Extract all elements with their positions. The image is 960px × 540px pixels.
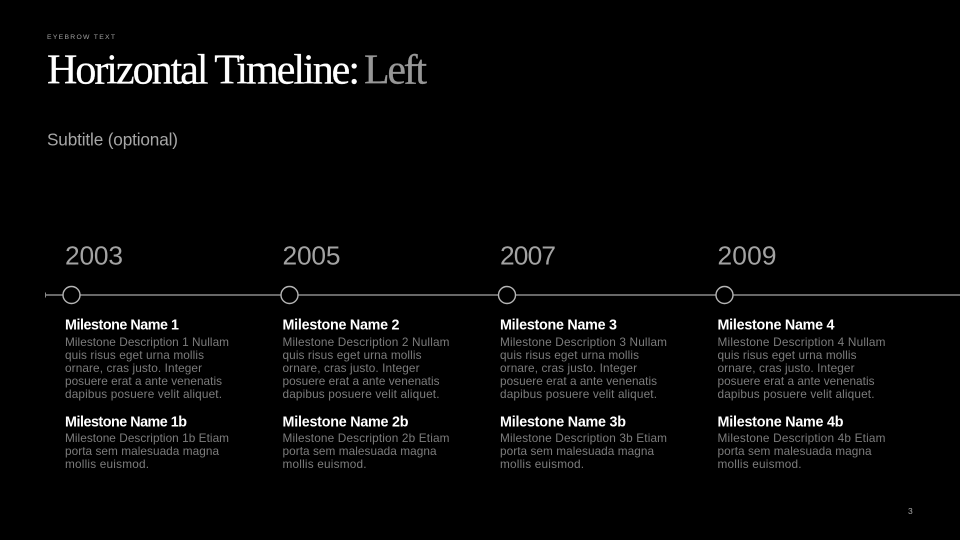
milestone description 2b	[282, 431, 450, 471]
milestone description 1b: Milestone Description 1b Etiam	[65, 431, 229, 445]
marker 4	[716, 286, 733, 304]
year 2007: 2007	[500, 240, 556, 270]
title: Horizontal Timeline:	[47, 48, 360, 94]
milestone description 2: quis risus eget urna mollis	[282, 348, 422, 362]
milestone description 3b: Milestone Description 3b Etiam	[500, 431, 667, 445]
milestone description 3b: porta sem malesuada magna	[500, 444, 654, 458]
milestone description 2: posuere erat a ante venenatis	[282, 374, 440, 388]
timeline axis	[46, 292, 960, 298]
milestone description 1: ornare, cras justo. Integer	[65, 361, 202, 375]
milestone description 4: ornare, cras justo. Integer	[718, 361, 855, 375]
milestone description 3: dapibus posuere velit aliquet.	[500, 387, 657, 401]
milestone description 4: dapibus posuere velit aliquet.	[718, 387, 874, 401]
milestone description 3b	[500, 431, 667, 471]
eyebrow text: EYEBROW TEXT	[47, 34, 115, 41]
milestone column 1	[63, 240, 229, 471]
milestone description 1: Milestone Description 1 Nullam	[65, 335, 229, 349]
milestone description 3: posuere erat a ante venenatis	[500, 374, 657, 388]
year 2005: 2005	[282, 240, 340, 270]
milestone description 2b: porta sem malesuada magna	[282, 444, 437, 458]
milestone description 4b	[718, 431, 886, 471]
milestone name 3b: Milestone Name 3b	[500, 414, 626, 430]
milestone description 1: quis risus eget urna mollis	[65, 348, 204, 362]
milestone name 1b: Milestone Name 1b	[65, 414, 187, 430]
milestone column 3	[498, 240, 667, 471]
milestone description 3: Milestone Description 3 Nullam	[500, 335, 667, 349]
milestone description 4b: porta sem malesuada magna	[718, 444, 872, 458]
milestone description 1: posuere erat a ante venenatis	[65, 374, 222, 388]
milestone description 1: dapibus posuere velit aliquet.	[65, 387, 222, 401]
milestone name 2b: Milestone Name 2b	[282, 414, 409, 430]
milestone description 2	[282, 335, 450, 401]
milestone description 3	[500, 335, 667, 401]
milestone description 4b: Milestone Description 4b Etiam	[718, 431, 886, 445]
title: Left	[364, 48, 427, 94]
milestone description 3b: mollis euismod.	[500, 457, 584, 471]
year 2009: 2009	[718, 240, 776, 270]
milestone description 2b: mollis euismod.	[282, 457, 366, 471]
milestone description 4b: mollis euismod.	[718, 457, 802, 471]
milestone column 2	[281, 240, 450, 471]
milestone name 3: Milestone Name 3	[500, 318, 617, 334]
milestone column 4	[716, 240, 886, 471]
marker 3	[498, 286, 516, 304]
milestone description 2b: Milestone Description 2b Etiam	[282, 431, 450, 445]
marker 1	[63, 286, 80, 304]
milestone description 1b: mollis euismod.	[65, 457, 149, 471]
milestone name 1: Milestone Name 1	[65, 318, 179, 334]
milestone description 3: ornare, cras justo. Integer	[500, 361, 637, 375]
milestone description 1b	[65, 431, 229, 471]
milestone description 1b: porta sem malesuada magna	[65, 444, 219, 458]
year 2003: 2003	[65, 240, 123, 270]
marker 2	[281, 286, 298, 304]
milestone name 4: Milestone Name 4	[718, 318, 835, 334]
milestone name 4b: Milestone Name 4b	[718, 414, 844, 430]
milestone description 4	[718, 335, 886, 401]
milestone description 4: quis risus eget urna mollis	[718, 348, 857, 362]
milestone description 4: Milestone Description 4 Nullam	[718, 335, 886, 349]
milestone description 2: dapibus posuere velit aliquet.	[282, 387, 440, 401]
milestone description 2: ornare, cras justo. Integer	[282, 361, 420, 375]
milestone description 4: posuere erat a ante venenatis	[718, 374, 875, 388]
milestone description 3: quis risus eget urna mollis	[500, 348, 639, 362]
milestone description 1	[65, 335, 229, 401]
page number: 3	[908, 506, 913, 516]
subtitle: Subtitle (optional)	[47, 130, 178, 150]
milestone name 2: Milestone Name 2	[282, 318, 400, 334]
milestone description 2: Milestone Description 2 Nullam	[282, 335, 450, 349]
